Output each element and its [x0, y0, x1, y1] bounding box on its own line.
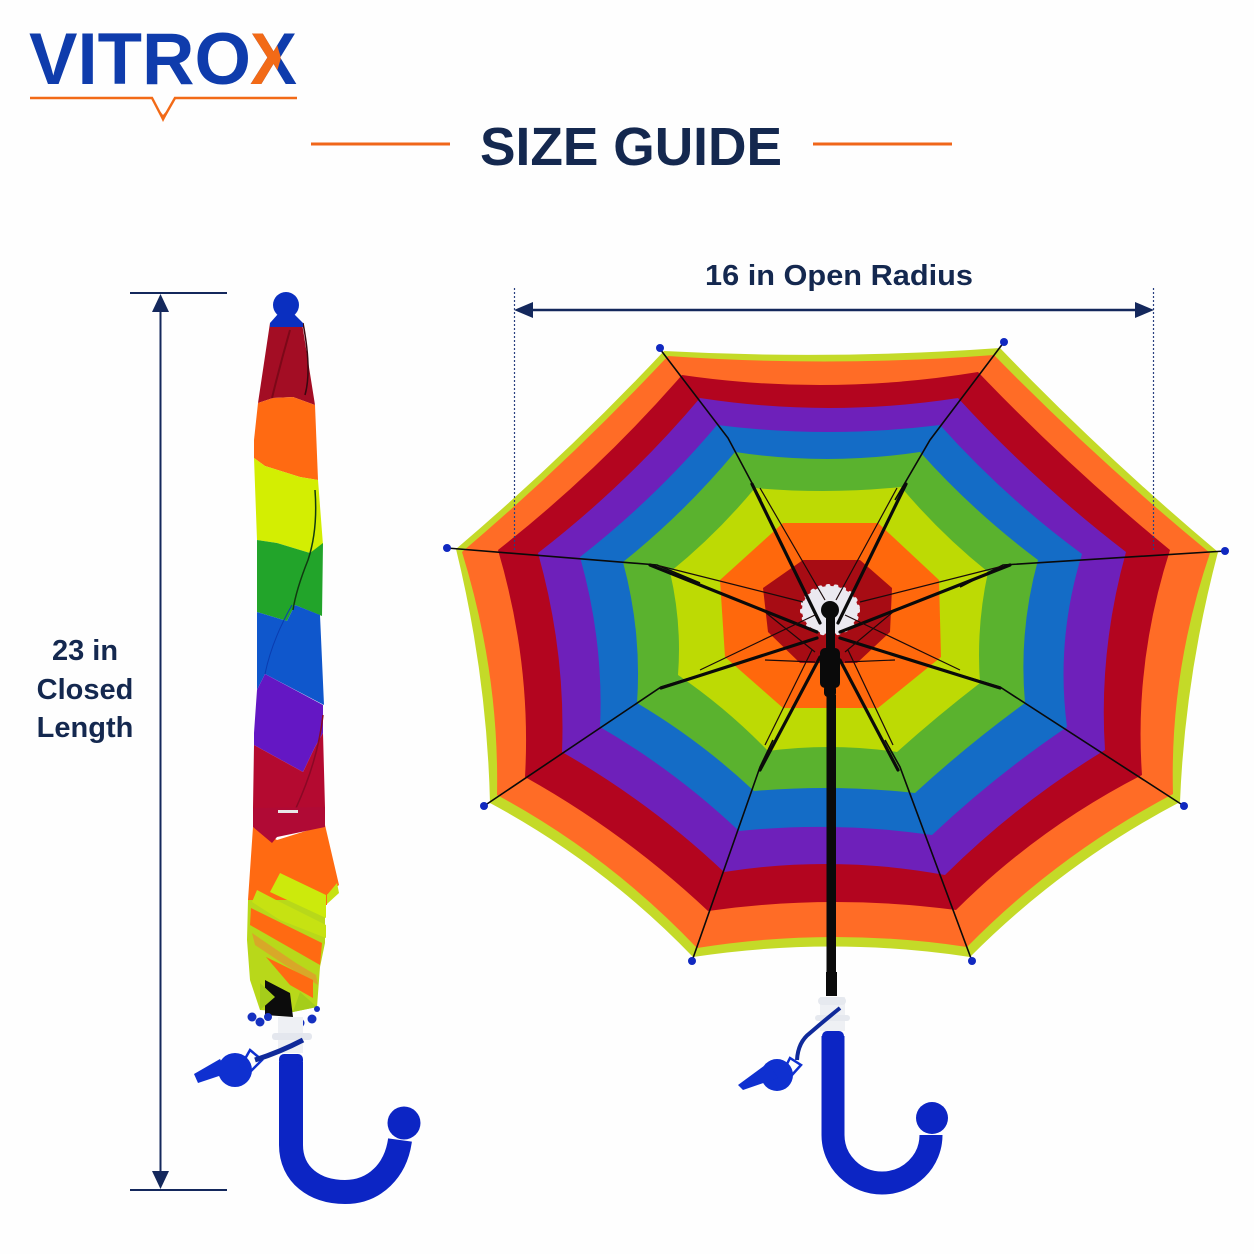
label: 23 in closed length: 23 in	[52, 635, 118, 667]
dimension: closed length arrow	[130, 293, 227, 1190]
open umbrella: rib tips	[443, 338, 1229, 965]
label: 16 in open radius: 16 in Open Radius	[705, 260, 973, 292]
dimension: dashed guide lines	[514, 288, 1154, 552]
open umbrella: whistle	[738, 1008, 840, 1091]
logo: Vitrox: VITRO	[29, 19, 251, 100]
logo: Vitrox: X	[250, 19, 297, 100]
closed umbrella: whistle	[194, 1040, 303, 1087]
closed umbrella: inner shadow and tips	[248, 980, 320, 1028]
logo: Vitrox: X	[250, 19, 297, 100]
closed umbrella	[194, 292, 420, 1192]
dimension: open radius arrow	[514, 302, 1154, 318]
label: 23 in closed length: Length	[37, 712, 133, 744]
closed umbrella: canopy bands	[247, 323, 339, 1012]
open umbrella: white centre	[802, 586, 858, 634]
open umbrella: outer ribs	[447, 342, 1225, 961]
open umbrella: thin stretchers	[660, 488, 1003, 745]
closed umbrella: top cap	[270, 292, 303, 327]
closed umbrella: strap	[253, 807, 325, 843]
label: 23 in closed length: Closed	[37, 674, 133, 706]
title: Size Guide: SIZE GUIDE	[480, 117, 782, 177]
open umbrella	[443, 338, 1229, 1183]
open umbrella: hub and shaft	[820, 601, 840, 996]
closed umbrella: collar	[272, 1017, 312, 1053]
closed umbrella: handle	[279, 1054, 420, 1192]
open umbrella: handle	[822, 1031, 948, 1183]
open umbrella: canopy rings	[456, 348, 1218, 957]
logo: Vitrox	[30, 32, 297, 122]
open umbrella: inner struts	[650, 484, 1010, 770]
label: 23 in closed length	[37, 635, 133, 744]
closed umbrella: fold lines	[265, 323, 323, 808]
open umbrella: collar	[815, 997, 850, 1031]
closed umbrella: hem stripes	[250, 873, 339, 998]
